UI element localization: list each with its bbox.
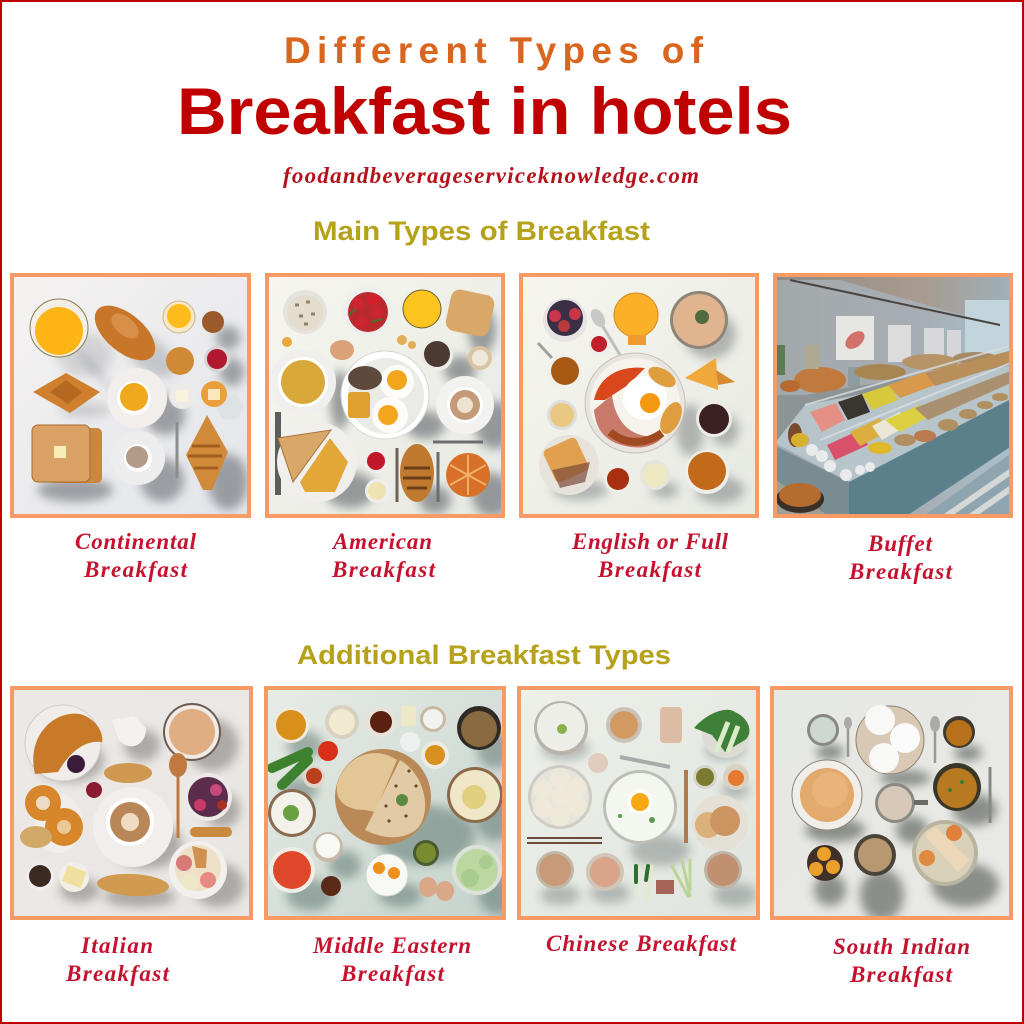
icon: yogurt bowl bbox=[268, 789, 316, 837]
label: Chinese Breakfast: Chinese Breakfast bbox=[546, 931, 737, 956]
icon: steamed buns plate bbox=[528, 765, 592, 829]
icon: milk cup bbox=[875, 783, 928, 823]
icon: cucumbers bbox=[272, 752, 308, 785]
label: American Breakfast: Breakfast bbox=[331, 557, 436, 582]
icon: bok choy bbox=[694, 710, 750, 758]
icon: full english plate bbox=[585, 353, 686, 453]
label: South Indian Breakfast bbox=[833, 934, 970, 987]
label: American Breakfast: American bbox=[331, 529, 432, 554]
icon: fried egg plate bbox=[341, 351, 429, 439]
icon: oatmeal bowl bbox=[670, 291, 728, 349]
label: American Breakfast bbox=[331, 529, 436, 582]
icon: toast and potatoes plate bbox=[277, 422, 357, 502]
icon: pancakes plate bbox=[692, 795, 748, 851]
label: South Indian Breakfast: Breakfast bbox=[849, 962, 953, 987]
white cups bbox=[806, 444, 875, 481]
label: Middle Eastern Breakfast: Breakfast bbox=[340, 961, 445, 986]
label: English or Full Breakfast bbox=[571, 529, 729, 582]
icon: toast with butter bbox=[32, 425, 102, 483]
buffet counter bbox=[773, 360, 1013, 445]
icon: berries bowl bbox=[184, 773, 232, 821]
panel: english or full breakfast bbox=[519, 273, 759, 517]
heading: Additional Breakfast Types: Additional Breakfast Types bbox=[297, 640, 671, 670]
dishes on counter front bbox=[868, 393, 1008, 454]
title: Breakfast in hotels: Breakfast in hotels bbox=[177, 74, 792, 148]
icon: egg congee bowl bbox=[603, 770, 677, 844]
icon: congee bowl bbox=[534, 701, 588, 755]
label: Italian Breakfast: Breakfast bbox=[65, 961, 170, 986]
icon: latte cup bbox=[93, 787, 173, 867]
label: Continental Breakfast: Continental bbox=[75, 529, 197, 554]
icon: hummus bowl bbox=[447, 767, 503, 823]
label: Continental Breakfast: Breakfast bbox=[83, 557, 188, 582]
label: Buffet Breakfast bbox=[848, 531, 953, 584]
label: Italian Breakfast bbox=[65, 933, 170, 986]
icon: tomato bowl bbox=[269, 847, 315, 893]
icon: dosa plate bbox=[792, 760, 862, 830]
icon: orange sweets bowl bbox=[807, 845, 843, 881]
icon: corn flakes bowl bbox=[278, 357, 336, 408]
icon: croissant upright bbox=[186, 415, 228, 490]
title: Different Types of: Different Types of bbox=[284, 30, 704, 71]
icon: orange juice bbox=[614, 293, 658, 345]
icon: cereal bowl bbox=[283, 290, 327, 334]
label: Continental Breakfast bbox=[75, 529, 197, 582]
food trays bbox=[810, 350, 1013, 460]
panel: middle eastern breakfast bbox=[268, 690, 502, 916]
icon: fruit bowl bbox=[169, 841, 227, 899]
icon: juice glass bbox=[30, 299, 88, 357]
panel: buffet breakfast bbox=[773, 273, 1013, 517]
label: Middle Eastern Breakfast: Middle Eastern bbox=[312, 933, 471, 958]
label: Middle Eastern Breakfast bbox=[312, 933, 471, 986]
icon: strawberries bbox=[347, 292, 388, 332]
icon: pastries bbox=[20, 785, 83, 853]
fried pastry bowl bbox=[776, 483, 824, 513]
icon: toast plate bbox=[539, 435, 599, 495]
icon: idli plate bbox=[856, 705, 924, 774]
panel: italian breakfast bbox=[10, 686, 253, 919]
panel: chinese breakfast bbox=[517, 686, 760, 919]
panel: continental breakfast bbox=[10, 273, 251, 517]
label: Buffet Breakfast: Breakfast bbox=[848, 559, 953, 584]
panel: american breakfast bbox=[265, 273, 515, 517]
label: English or Full Breakfast: Breakfast bbox=[597, 557, 702, 582]
icon: croissant bbox=[94, 306, 156, 360]
website url: foodandbeverageserviceknowledge.com bbox=[283, 163, 699, 188]
wall art bbox=[836, 316, 961, 362]
panel: south indian breakfast bbox=[770, 686, 1013, 921]
icon: croissant plate bbox=[25, 705, 102, 781]
label: Italian Breakfast: Italian bbox=[80, 933, 153, 958]
icon: chopsticks bbox=[527, 838, 602, 843]
icon: bun bowl bbox=[163, 703, 221, 761]
icon: tea cup bbox=[685, 450, 729, 494]
heading: Main Types of Breakfast: Main Types of Breakfast bbox=[313, 216, 650, 246]
icon: toast bbox=[446, 290, 494, 336]
icon: dosa roll plate bbox=[912, 820, 978, 886]
icon: sambar bowl bbox=[933, 763, 981, 811]
icon: spring onions bbox=[636, 860, 690, 898]
label: Buffet Breakfast: Buffet bbox=[867, 531, 933, 556]
icon: fried eggs bbox=[366, 854, 408, 896]
label: English or Full Breakfast: English or Full bbox=[571, 529, 729, 554]
back counter food bbox=[777, 345, 997, 393]
icon: cucumber plate bbox=[452, 845, 502, 895]
icon: flatbread board bbox=[335, 749, 431, 845]
label: South Indian Breakfast: South Indian bbox=[833, 934, 970, 959]
